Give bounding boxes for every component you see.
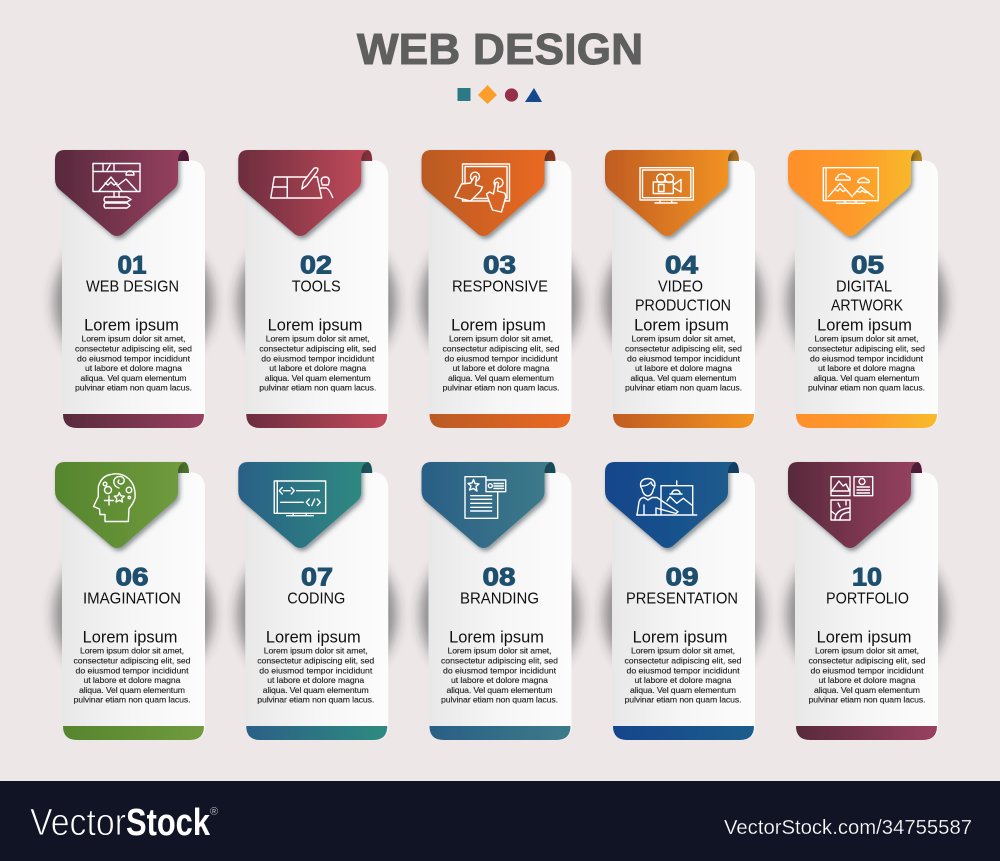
text block: ut labore et dolore magna <box>84 675 181 685</box>
text block: Lorem ipsum <box>817 629 911 647</box>
icon: video camera on monitor <box>640 168 693 203</box>
text block: Lorem ipsum <box>449 629 544 647</box>
text block <box>624 629 742 705</box>
card 09: presentation <box>604 462 764 740</box>
heading <box>635 279 731 315</box>
heading: VIDEO <box>658 279 703 296</box>
text block: pulvinar etiam non quam lacus. <box>74 695 190 705</box>
text block: pulvinar etiam non quam lacus. <box>259 383 376 393</box>
text block <box>75 317 192 393</box>
number: 10 <box>852 563 882 591</box>
text block: consectetur adipiscing elit, sed <box>75 344 192 354</box>
text block: Lorem ipsum dolor sit amet, <box>814 334 918 344</box>
card 06: imagination <box>54 462 214 740</box>
text block: aliqua. Vel quam elementum <box>263 685 369 695</box>
text block <box>257 629 374 705</box>
text block: consectetur adipiscing elit, sed <box>624 656 742 666</box>
text block: ut labore et dolore magna <box>85 363 182 373</box>
text block: aliqua. Vel quam elementum <box>446 685 552 695</box>
card 08: branding <box>420 462 580 740</box>
number: 02 <box>300 251 332 279</box>
card 02: tools <box>237 150 397 428</box>
text block <box>442 317 560 393</box>
text block: aliqua. Vel quam elementum <box>814 373 920 383</box>
text block: Lorem ipsum dolor sit amet, <box>632 334 736 344</box>
number: 09 <box>666 563 698 591</box>
number: 04 <box>665 251 698 279</box>
icon: touch screen hands <box>455 164 510 212</box>
text block: Lorem ipsum <box>817 317 912 335</box>
title: WEB DESIGN <box>357 25 643 74</box>
text block: ut labore et dolore magna <box>451 675 548 685</box>
text block: consectetur adipiscing elit, sed <box>441 656 558 666</box>
watermark logo <box>30 802 218 844</box>
text block: pulvinar etiam non quam lacus. <box>442 383 560 393</box>
number: 01 <box>118 251 147 279</box>
icon: brand document and card <box>465 477 506 518</box>
decorative shapes row <box>458 85 542 104</box>
icon: landscape on monitor <box>823 168 878 203</box>
text block: pulvinar etiam non quam lacus. <box>624 695 742 705</box>
heading: CODING <box>287 591 345 608</box>
heading: WEB DESIGN <box>86 279 179 296</box>
watermark id: VectorStock.com/34755587 <box>724 816 972 839</box>
icon: portfolio tiles <box>831 477 873 520</box>
text block: Lorem ipsum dolor sit amet, <box>631 646 735 656</box>
text block: consectetur adipiscing elit, sed <box>259 344 376 354</box>
text block: ut labore et dolore magna <box>452 363 550 373</box>
text block <box>441 629 558 705</box>
card 04: video production <box>604 150 764 428</box>
text block: consectetur adipiscing elit, sed <box>808 656 926 666</box>
text block: Lorem ipsum dolor sit amet, <box>82 334 186 344</box>
text block: aliqua. Vel quam elementum <box>630 373 736 383</box>
number: 08 <box>482 563 516 591</box>
text block: consectetur adipiscing elit, sed <box>257 656 374 666</box>
text block: do eiusmod tempor incididunt <box>444 353 558 363</box>
heading: BRANDING <box>460 591 539 608</box>
icon: code on monitor <box>274 481 326 516</box>
text block: consectetur adipiscing elit, sed <box>808 344 925 354</box>
text block: Lorem ipsum <box>83 629 177 647</box>
number: 05 <box>851 251 884 279</box>
watermark logo: Vector <box>30 802 126 844</box>
text block: aliqua. Vel quam elementum <box>79 685 185 695</box>
heading: TOOLS <box>292 279 341 296</box>
text block: do eiusmod tempor incididunt <box>443 665 557 675</box>
heading <box>831 279 903 315</box>
text block: pulvinar etiam non quam lacus. <box>441 695 558 705</box>
text block: aliqua. Vel quam elementum <box>630 685 736 695</box>
text block: do eiusmod tempor incididunt <box>627 353 741 363</box>
heading: PRODUCTION <box>635 298 731 315</box>
icon: monitor and pencils <box>93 164 140 208</box>
text block: ut labore et dolore magna <box>267 675 364 685</box>
text block: pulvinar etiam non quam lacus. <box>808 383 925 393</box>
card 05: digital artwork <box>786 150 946 428</box>
icon: graphic tablet and pen <box>271 168 333 198</box>
text block: aliqua. Vel quam elementum <box>448 373 554 383</box>
text block: Lorem ipsum dolor sit amet, <box>815 646 919 656</box>
text block: do eiusmod tempor incididunt <box>810 353 924 363</box>
text block: pulvinar etiam non quam lacus. <box>257 695 374 705</box>
text block: do eiusmod tempor incididunt <box>626 665 740 675</box>
footer bar <box>0 781 1000 861</box>
text block: Lorem ipsum <box>266 629 361 647</box>
text block: aliqua. Vel quam elementum <box>80 373 186 383</box>
text block: Lorem ipsum <box>84 317 179 335</box>
card 03: responsive <box>420 150 580 428</box>
card 01: web design <box>54 150 214 428</box>
text block: do eiusmod tempor incididunt <box>76 665 189 675</box>
heading: ARTWORK <box>831 298 903 315</box>
watermark logo: Stock <box>126 802 211 844</box>
text block: do eiusmod tempor incididunt <box>810 665 924 675</box>
text block: ut labore et dolore magna <box>818 675 916 685</box>
heading: RESPONSIVE <box>452 279 548 296</box>
number: 03 <box>483 251 516 279</box>
heading: PRESENTATION <box>626 591 738 608</box>
text block: pulvinar etiam non quam lacus. <box>75 383 192 393</box>
card 07: coding <box>237 462 397 740</box>
text block: aliqua. Vel quam elementum <box>814 685 920 695</box>
text block: consectetur adipiscing elit, sed <box>442 344 560 354</box>
text block: Lorem ipsum dolor sit amet, <box>264 646 368 656</box>
text block <box>625 317 742 393</box>
text block: ut labore et dolore magna <box>635 363 732 373</box>
text block: do eiusmod tempor incididunt <box>259 665 373 675</box>
icon: head with ideas <box>94 474 135 522</box>
text block: ut labore et dolore magna <box>634 675 732 685</box>
text block: pulvinar etiam non quam lacus. <box>808 695 926 705</box>
number: 07 <box>301 563 333 591</box>
text block <box>808 629 926 705</box>
text block: do eiusmod tempor incididunt <box>261 353 375 363</box>
text block: Lorem ipsum <box>634 317 729 335</box>
heading: IMAGINATION <box>83 591 181 608</box>
text block: Lorem ipsum <box>633 629 727 647</box>
text block: Lorem ipsum <box>451 317 546 335</box>
text block: Lorem ipsum dolor sit amet, <box>80 646 184 656</box>
number: 06 <box>116 563 148 591</box>
text block: Lorem ipsum <box>268 317 362 335</box>
text block <box>74 629 191 705</box>
watermark logo: ® <box>210 806 218 818</box>
text block: ut labore et dolore magna <box>818 363 915 373</box>
text block: ut labore et dolore magna <box>269 363 366 373</box>
text block: consectetur adipiscing elit, sed <box>625 344 742 354</box>
text block: Lorem ipsum dolor sit amet, <box>266 334 370 344</box>
heading: PORTFOLIO <box>826 591 909 608</box>
icon: presenter at board <box>637 478 697 515</box>
text block <box>808 317 925 393</box>
text block: consectetur adipiscing elit, sed <box>74 656 191 666</box>
text block: aliqua. Vel quam elementum <box>265 373 371 383</box>
text block: Lorem ipsum dolor sit amet, <box>449 334 553 344</box>
heading: DIGITAL <box>836 279 892 296</box>
text block: Lorem ipsum dolor sit amet, <box>448 646 552 656</box>
text block <box>259 317 376 393</box>
text block: do eiusmod tempor incididunt <box>77 353 191 363</box>
text block: pulvinar etiam non quam lacus. <box>625 383 742 393</box>
card 10: portfolio <box>786 462 946 740</box>
